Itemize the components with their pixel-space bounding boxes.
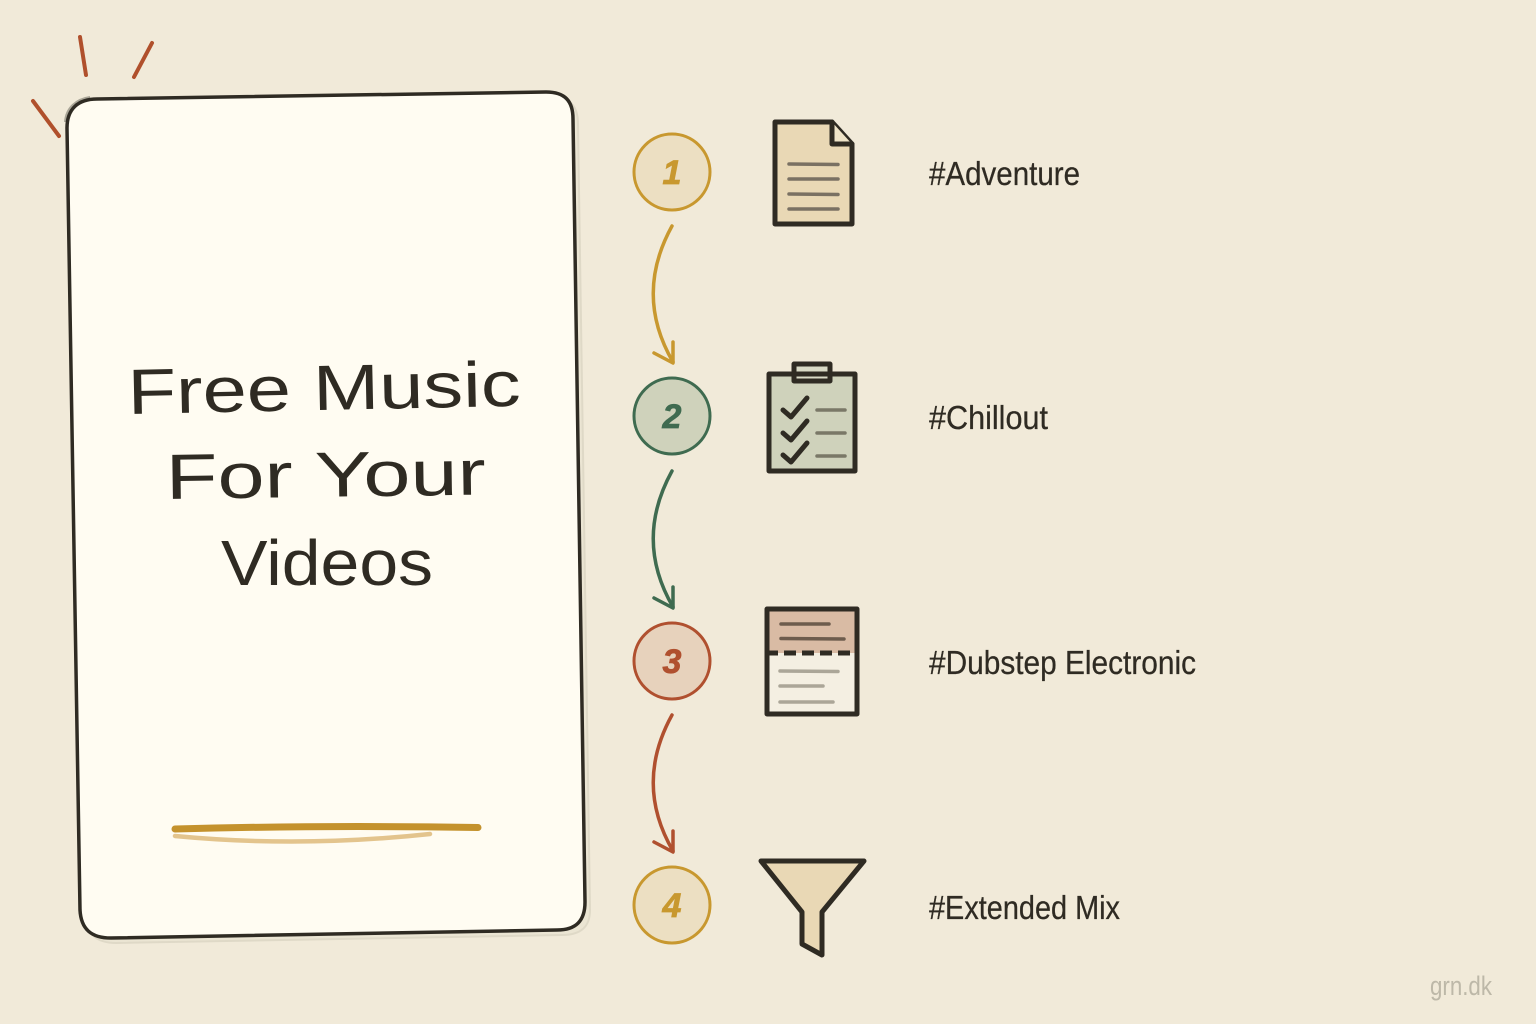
- heading: title: [127, 348, 521, 599]
- label: Dubstep Electronic: #Dubstep Electronic: [929, 644, 1196, 681]
- step 2 badge: 2: [662, 398, 682, 436]
- watermark: grn.dk: [1430, 971, 1492, 1001]
- icon: clipboard checklist: [769, 364, 855, 471]
- heading: title: For Your: [165, 437, 486, 513]
- arrow: step 3 to step 4: [653, 715, 673, 852]
- step 2 badge: [634, 378, 710, 454]
- arrow: step 2 to step 3: [653, 471, 673, 608]
- arrow: step 1 to step 2: [653, 226, 673, 363]
- icon: torn form: [766, 608, 858, 714]
- icon: document: [775, 122, 852, 224]
- heading: title: Free Music: [127, 348, 521, 428]
- label: Chillout: #Chillout: [929, 399, 1048, 436]
- accent rays: [33, 37, 152, 136]
- step 4 badge: [634, 867, 710, 943]
- heading: title: Videos: [221, 527, 433, 599]
- icon: funnel: [761, 861, 864, 955]
- step 1 badge: [634, 134, 710, 210]
- step 4 badge: 4: [662, 887, 682, 925]
- step 3 badge: 3: [663, 643, 682, 681]
- label: Extended Mix: #Extended Mix: [929, 889, 1120, 926]
- label: Adventure: #Adventure: [929, 155, 1080, 192]
- step 1 badge: 1: [663, 154, 681, 192]
- step 3 badge: [634, 623, 710, 699]
- title underline: [175, 827, 478, 842]
- panel: title card: [65, 92, 590, 943]
